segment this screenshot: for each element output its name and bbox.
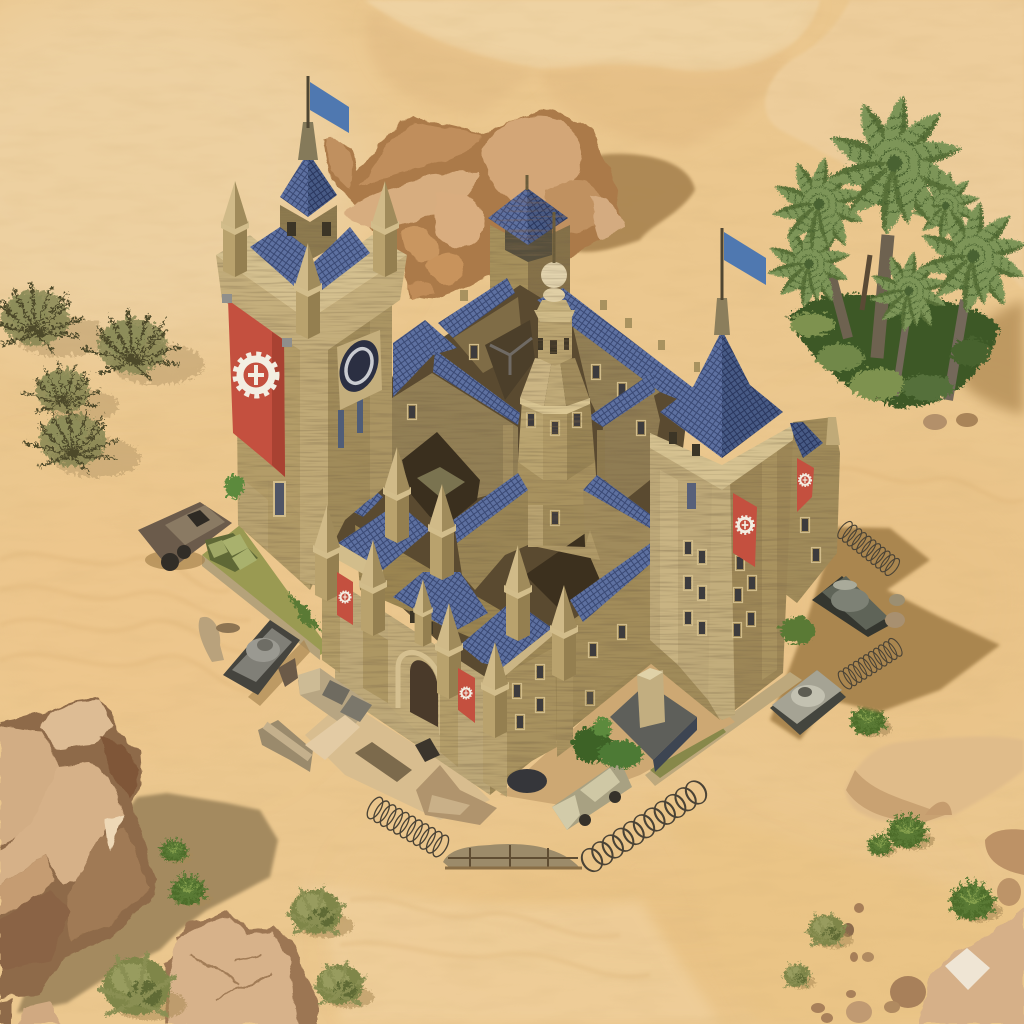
north-west inner wall [392, 297, 535, 520]
flag on east tower [724, 232, 766, 285]
south-east tank [770, 670, 846, 735]
sandbag wall [443, 844, 582, 868]
fortress plinth and ground [202, 525, 802, 820]
sandbags and crates [199, 617, 547, 825]
south armoured car [552, 760, 632, 830]
green supply crates [205, 533, 258, 572]
north-east roofs [537, 288, 692, 427]
west armoured car [138, 502, 232, 571]
back rock shadow [570, 154, 695, 252]
south-west wall with gate [335, 503, 552, 795]
north-east inner wall [573, 327, 660, 500]
shrubs on the west dune [0, 279, 201, 475]
oasis stones [923, 413, 978, 430]
fern by monument [570, 715, 640, 766]
red gear banner on great tower [222, 294, 292, 477]
south wall turrets and pillars [313, 447, 578, 797]
south-east great tower [650, 228, 840, 720]
courtyard floor [330, 285, 690, 690]
sand dunes [300, 0, 1024, 1024]
eastern flat rock [845, 736, 1024, 822]
fern at great tower [223, 472, 241, 496]
bottom-left rock shadow [17, 793, 278, 1013]
south-east wing wall [490, 535, 663, 795]
north-east tank [812, 576, 905, 637]
clock emblem on great tower [332, 330, 386, 410]
palm oasis [766, 94, 1024, 415]
merlons behind the north-east roof [460, 290, 700, 372]
central keep tower [503, 212, 605, 547]
back rock cluster [323, 108, 625, 300]
bottom-right boulders [811, 829, 1024, 1024]
flag on great tower [310, 82, 349, 133]
garden plants [285, 590, 320, 630]
inner roofs [328, 468, 662, 543]
north-west roofs [393, 278, 520, 425]
north-west great tower [216, 76, 407, 590]
wall banners [337, 572, 475, 723]
inner south courtyard [525, 530, 610, 610]
back tower [488, 175, 570, 340]
fortress cast shadow on the east sand [770, 527, 1000, 740]
west tank [223, 620, 310, 706]
shrubs and grasses on the south sand [96, 700, 1001, 1018]
bottom-centre rock [0, 910, 317, 1024]
bottom-left rock [0, 697, 157, 1000]
inner wall ranges [355, 490, 662, 650]
stone monument [610, 668, 697, 772]
barbed wire coils [364, 519, 905, 875]
